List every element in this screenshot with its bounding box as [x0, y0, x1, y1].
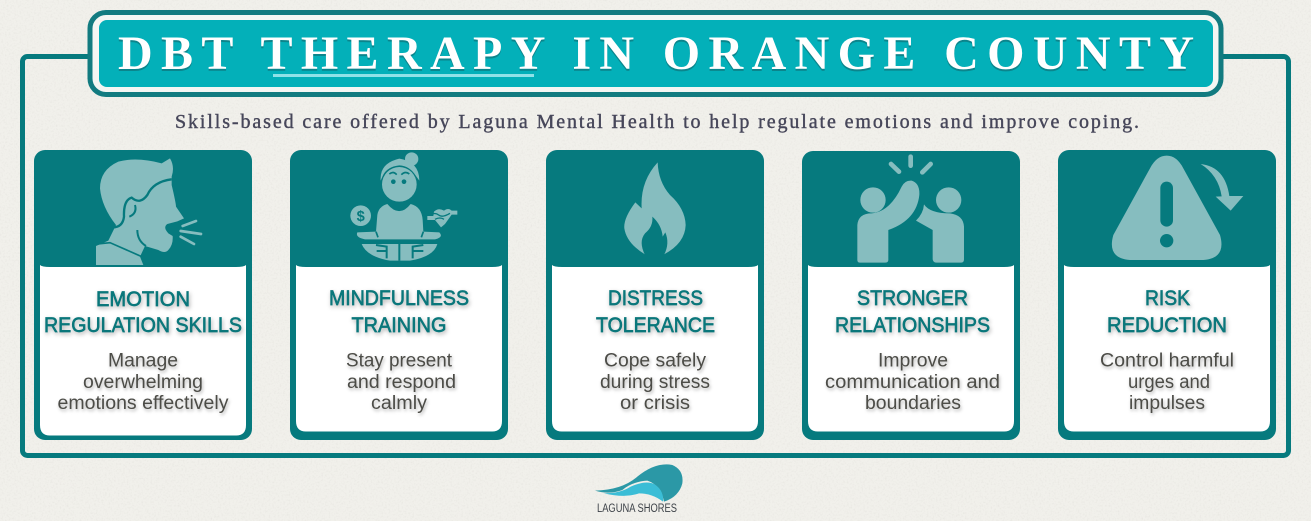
- card description: Stay present: [346, 350, 453, 372]
- card heading: REGULATION SKILLS: [44, 314, 242, 337]
- card heading: TRAINING: [352, 314, 446, 337]
- card description: during stress: [600, 372, 710, 393]
- card heading: DISTRESS: [608, 287, 703, 310]
- card description: emotions effectively: [58, 393, 229, 414]
- panel: mindfulness training: [290, 150, 508, 440]
- card description: or crisis: [620, 393, 690, 414]
- icon: flame: [624, 162, 686, 255]
- card description: boundaries: [865, 393, 961, 414]
- card heading: RISK: [1145, 287, 1190, 310]
- panel: emotion regulation skills: [34, 150, 252, 440]
- subtitle: Skills-based care offered by Laguna Mental Health to help regulate emotions and improve coping.: [175, 111, 1139, 133]
- icon: meditating person: [350, 152, 457, 261]
- title underline: [273, 74, 534, 77]
- card description: and respond: [347, 372, 456, 393]
- card heading: TOLERANCE: [596, 314, 715, 337]
- panel: stronger relationships: [802, 151, 1020, 440]
- title: DBT THERAPY IN ORANGE COUNTY: [118, 27, 1194, 80]
- card heading: STRONGER: [857, 287, 968, 310]
- card description: communication and: [825, 372, 1000, 393]
- icon: warning triangle with arrow: [1112, 156, 1243, 260]
- icon: wave: [595, 464, 683, 502]
- icon: meditating person: $: [357, 209, 365, 225]
- card description: Control harmful: [1100, 350, 1234, 372]
- outer frame: [22, 56, 1288, 456]
- card description: Cope safely: [604, 350, 706, 372]
- icon: person exhaling: [96, 158, 201, 265]
- card description: Manage: [108, 350, 178, 372]
- card heading: EMOTION: [96, 288, 190, 311]
- icon: high five: [857, 157, 964, 263]
- card description: impulses: [1129, 393, 1205, 414]
- card description: calmly: [371, 393, 428, 414]
- card heading: REDUCTION: [1107, 314, 1227, 337]
- panel: distress tolerance: [546, 150, 764, 440]
- logo wordmark: LAGUNA SHORES: [597, 503, 677, 515]
- card heading: RELATIONSHIPS: [835, 314, 990, 337]
- card description: Improve: [878, 350, 948, 372]
- title banner: [90, 12, 1221, 94]
- card description: overwhelming: [83, 372, 203, 393]
- card heading: MINDFULNESS: [329, 287, 469, 310]
- logo: Laguna Shores: [595, 464, 683, 515]
- panel: risk reduction: [1058, 150, 1276, 440]
- card description: urges and: [1128, 372, 1210, 393]
